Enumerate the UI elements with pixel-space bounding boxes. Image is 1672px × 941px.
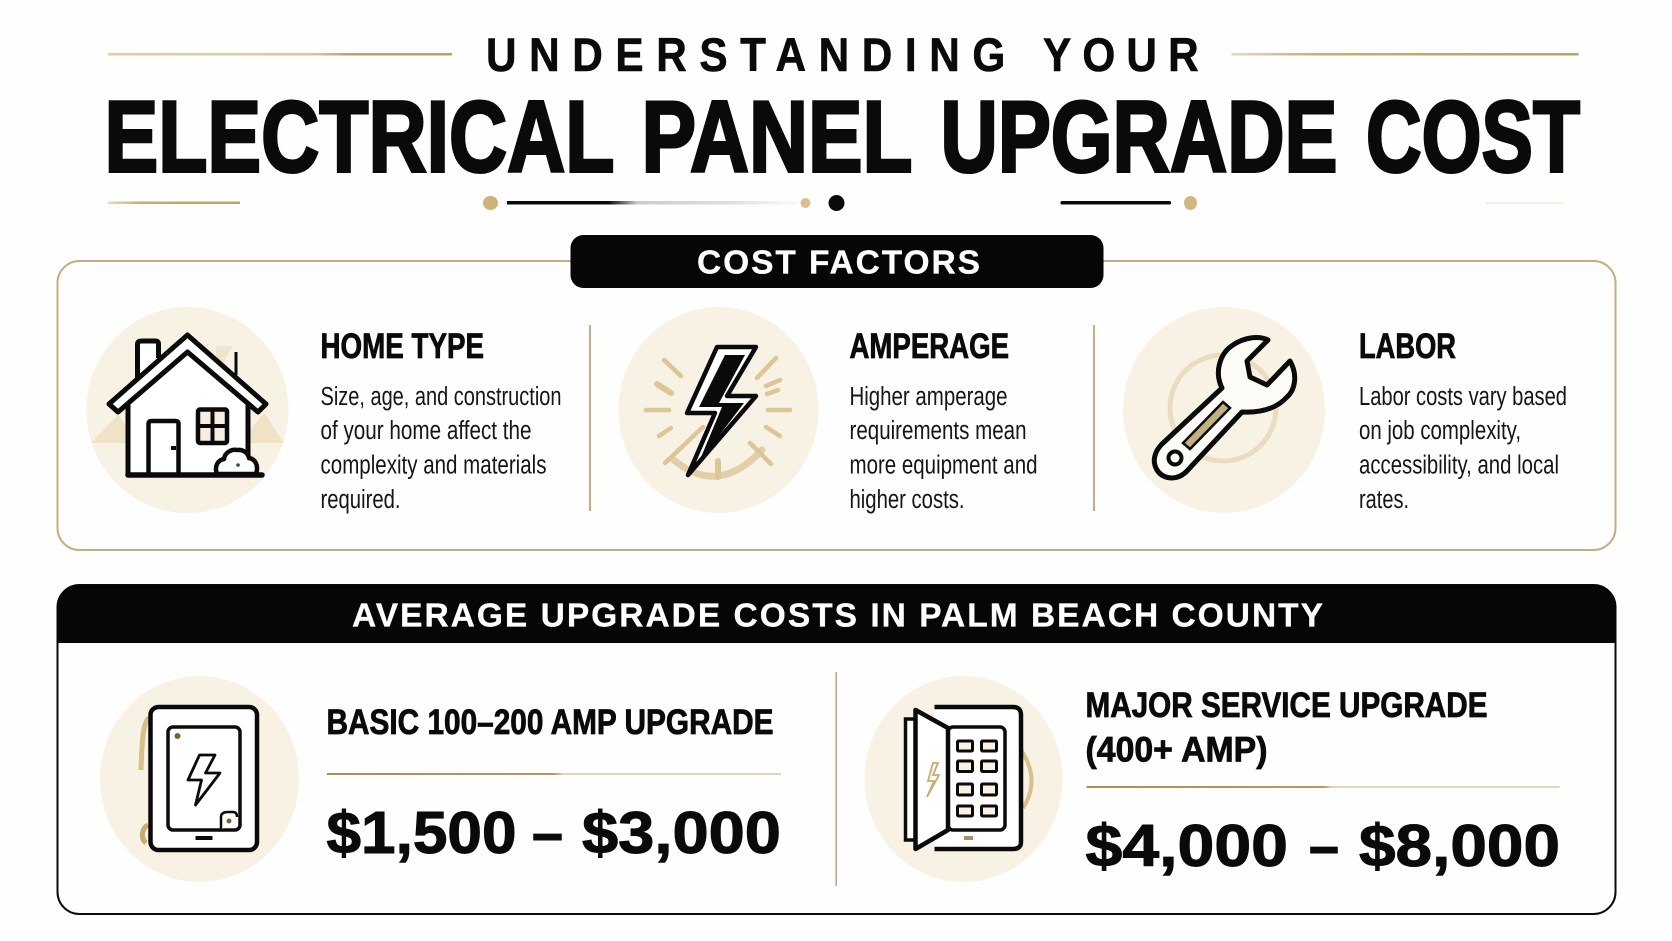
title line 2: PANEL: [642, 80, 912, 194]
title line 1: YOUR: [1043, 30, 1199, 82]
rule: [327, 773, 781, 775]
price: basic upgrade: –: [532, 800, 563, 866]
title line 1: UNDERSTANDING: [486, 30, 1005, 82]
description: home type: complexity and materials: [320, 452, 546, 480]
heading pill: cost factors: [570, 235, 1104, 288]
ornament row under title: [108, 195, 1564, 211]
heading: major upgrade: [1086, 686, 1488, 770]
title line 2: UPGRADE: [940, 80, 1338, 194]
icon: lightning bolt: [618, 307, 818, 513]
factor: labor: [1123, 307, 1567, 514]
description: amperage: [850, 383, 1038, 514]
description: amperage: higher costs.: [850, 486, 964, 514]
header bar: [57, 585, 1616, 643]
divider: [589, 325, 591, 511]
panel border: [58, 585, 1616, 914]
cost: major upgrade: [864, 676, 1560, 882]
icon: house: [86, 307, 288, 513]
price: basic upgrade: [326, 800, 781, 866]
description: labor: Labor costs vary based: [1359, 383, 1567, 411]
header bar: AVERAGE UPGRADE COSTS IN PALM BEACH COUNTY: [352, 598, 1323, 634]
description: labor: accessibility, and local: [1359, 452, 1559, 480]
heading: major upgrade: (400+ AMP): [1086, 730, 1268, 770]
title line 2: ELECTRICAL: [104, 80, 614, 194]
icon: open panel: [864, 676, 1062, 882]
description: amperage: more equipment and: [850, 452, 1038, 480]
description: amperage: Higher amperage: [850, 383, 1008, 411]
heading: basic upgrade: BASIC 100–200 AMP UPGRADE: [326, 703, 774, 742]
rule: top right: [1232, 53, 1578, 56]
divider: [836, 672, 837, 886]
heading: major upgrade: MAJOR SERVICE UPGRADE: [1086, 686, 1488, 725]
description: home type: Size, age, and construction: [320, 383, 562, 411]
description: home type: of your home affect the: [320, 417, 532, 445]
description: labor: on job complexity,: [1359, 417, 1521, 445]
price: major upgrade: [1086, 813, 1560, 879]
title line 2: [104, 80, 1580, 194]
cost: basic upgrade: [100, 676, 781, 882]
price: basic upgrade: $1,500: [326, 800, 516, 866]
icon: closed panel: [100, 676, 299, 882]
price: major upgrade: –: [1309, 813, 1339, 879]
description: home type: [320, 383, 562, 514]
factor: home type: [86, 307, 562, 514]
title line 2: COST: [1366, 80, 1580, 194]
description: labor: rates.: [1359, 486, 1409, 514]
rule: [1086, 786, 1560, 788]
panel: cost factors: [58, 235, 1616, 550]
heading: home type: HOME TYPE: [320, 327, 484, 366]
panel: average upgrade costs: [57, 585, 1616, 914]
description: home type: required.: [320, 486, 400, 514]
price: basic upgrade: $3,000: [582, 800, 781, 866]
heading: labor: LABOR: [1359, 327, 1456, 366]
description: labor: [1359, 383, 1567, 514]
rule: top left: [108, 53, 452, 56]
panel border: [58, 261, 1616, 550]
description: amperage: requirements mean: [850, 417, 1026, 445]
heading: amperage: AMPERAGE: [850, 327, 1009, 366]
heading pill: cost factors: COST FACTORS: [697, 244, 980, 282]
icon: wrench: [1123, 307, 1325, 513]
divider: [1093, 325, 1095, 511]
price: major upgrade: $8,000: [1359, 813, 1560, 879]
price: major upgrade: $4,000: [1086, 813, 1288, 879]
factor: amperage: [618, 307, 1038, 514]
title block: [104, 30, 1580, 211]
